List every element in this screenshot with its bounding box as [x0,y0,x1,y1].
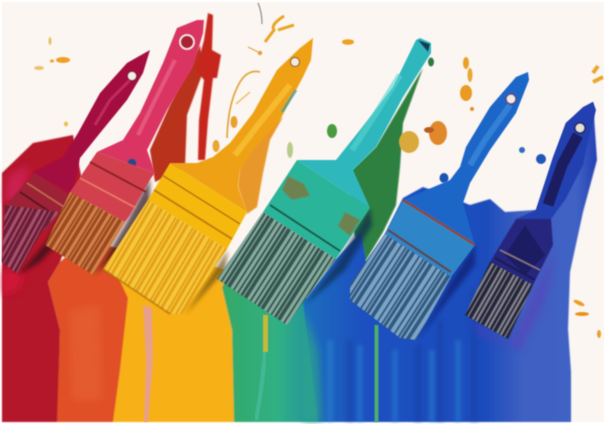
rust patches [282,176,360,236]
hole [180,35,194,49]
bristles [350,234,451,340]
bristles [217,212,336,325]
ferrule [5,173,72,232]
bristles [45,192,125,275]
paint: pale orange highlight [70,305,102,400]
paint: blue drip streaks [350,290,474,422]
ferrule [490,219,553,285]
handle [516,102,596,219]
brush 5: blue [350,72,529,340]
paint: green stripe [222,260,325,422]
brush 4: teal [217,38,431,325]
paint: yellow drip [263,315,268,352]
brush 3: yellow [103,38,313,314]
handle [97,20,204,173]
hole [575,123,585,133]
hole [418,40,430,52]
ferrule [70,152,155,222]
brush 2: red [45,20,204,275]
paint: green drip line [374,325,378,422]
bristles [103,200,227,314]
paint: red smear behind second brush [150,45,203,182]
paint: crimson stripe [2,135,85,422]
ferrule [148,163,247,249]
brush 6: navy [465,102,596,339]
ferrule [385,200,475,277]
handle [403,72,529,245]
paint: green smear behind teal handle [350,68,423,265]
paint: orange smear behind yellow handle [238,117,283,214]
shadows between brushes [18,178,475,340]
paint: purple halo under navy brush [470,250,555,350]
ferrule [263,160,370,259]
paint: yellow stripe [113,250,236,422]
bristles [2,205,60,274]
handle [33,50,150,195]
brush 1: crimson [0,50,150,274]
hole [290,58,300,66]
paint: orange stripe [48,240,128,422]
paint: pink patch on crimson [4,165,30,205]
hole [506,94,516,104]
hole [128,72,136,80]
bristles [465,262,533,339]
paint: pink drip in yellow [143,305,153,422]
handle [297,38,431,208]
paint: blue field [303,102,597,422]
paint: teal fade on blue [303,310,322,422]
handle [170,38,313,212]
splatters [34,3,603,338]
paint dab [128,158,136,168]
